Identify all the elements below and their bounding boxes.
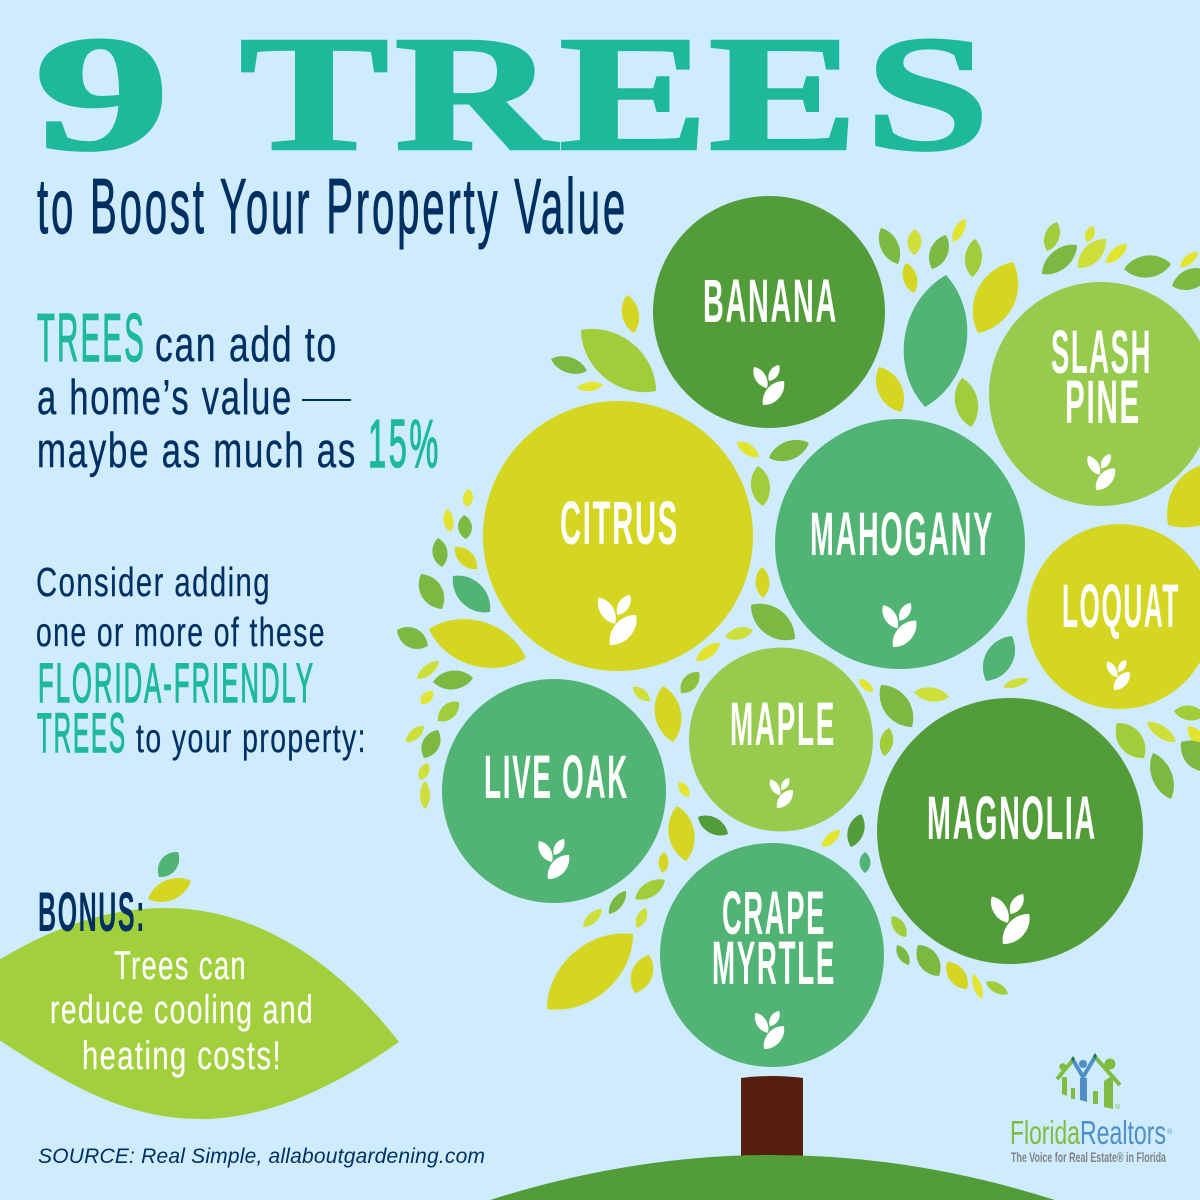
bonus leaf callout: BONUS:: [38, 880, 146, 943]
bonus leaf callout: [0, 847, 399, 1119]
leaves: left cluster: [393, 488, 532, 809]
circle: mahogany: [775, 419, 1025, 669]
text block: florida-friendly trees: one or more of these: [36, 609, 326, 655]
circle: crape myrtle: [660, 843, 884, 1067]
text: 15%: [368, 406, 441, 482]
bonus leaf callout: heating costs!: [82, 1034, 282, 1078]
florida realtors logo: ®: [1167, 1128, 1173, 1136]
circle: mahogany: MAHOGANY: [810, 500, 994, 568]
text block: trees add value: can add to: [155, 318, 338, 372]
source: SOURCE: Real Simple, allaboutgardening.com: [38, 1145, 485, 1168]
text block: trees add value: a home’s value: [37, 371, 293, 425]
leaves: center cluster: [630, 567, 1024, 873]
circle: citrus: [483, 401, 753, 671]
leaves: right cluster: [1002, 675, 1200, 803]
circle: live oak: LIVE OAK: [484, 743, 629, 811]
florida realtors logo: ®: [1115, 1103, 1121, 1111]
text block: trees add value: maybe as much as: [37, 424, 357, 478]
circle: slash pine: [989, 282, 1200, 506]
florida realtors logo: [1010, 1053, 1173, 1165]
text block: florida-friendly trees: FLORIDA-FRIENDLY: [38, 651, 315, 714]
bonus leaf callout: reduce cooling and: [50, 988, 314, 1032]
text block: florida-friendly trees: to your property:: [136, 715, 367, 761]
circle: magnolia: [877, 698, 1143, 964]
florida realtors logo: Realtors: [1080, 1114, 1166, 1151]
tree trunk: [741, 1076, 803, 1170]
text block: trees add value: [37, 300, 441, 482]
circle: maple: [689, 648, 873, 832]
leaves: lower left cluster: [531, 874, 669, 1028]
subtitle: to Boost Your Property Value: [37, 162, 628, 250]
text block: florida-friendly trees: [36, 559, 367, 764]
text block: florida-friendly trees: TREES: [37, 701, 127, 764]
title: 9: [34, 2, 170, 185]
circle: live oak: [442, 679, 666, 903]
text block: florida-friendly trees: Consider adding: [36, 559, 271, 605]
circle: maple: MAPLE: [730, 690, 836, 758]
circle: banana: [653, 196, 885, 428]
ground hill: [490, 1155, 1055, 1200]
circle: citrus: CITRUS: [560, 489, 679, 557]
title: TREES: [239, 2, 990, 185]
leaves: top right cluster: [868, 217, 1200, 545]
text block: trees add value: TREES: [37, 300, 146, 376]
leaves: top left cluster: [549, 293, 812, 507]
circle: loquat: [1027, 524, 1200, 709]
leaves: lower right cluster: [887, 913, 1010, 1000]
circle: banana: BANANA: [703, 267, 838, 335]
circle: crape myrtle: MYRTLE: [712, 929, 836, 997]
florida realtors logo: Florida: [1010, 1114, 1080, 1151]
circle: crape myrtle: CRAPE: [722, 879, 826, 947]
bonus leaf callout: Trees can: [114, 944, 247, 988]
